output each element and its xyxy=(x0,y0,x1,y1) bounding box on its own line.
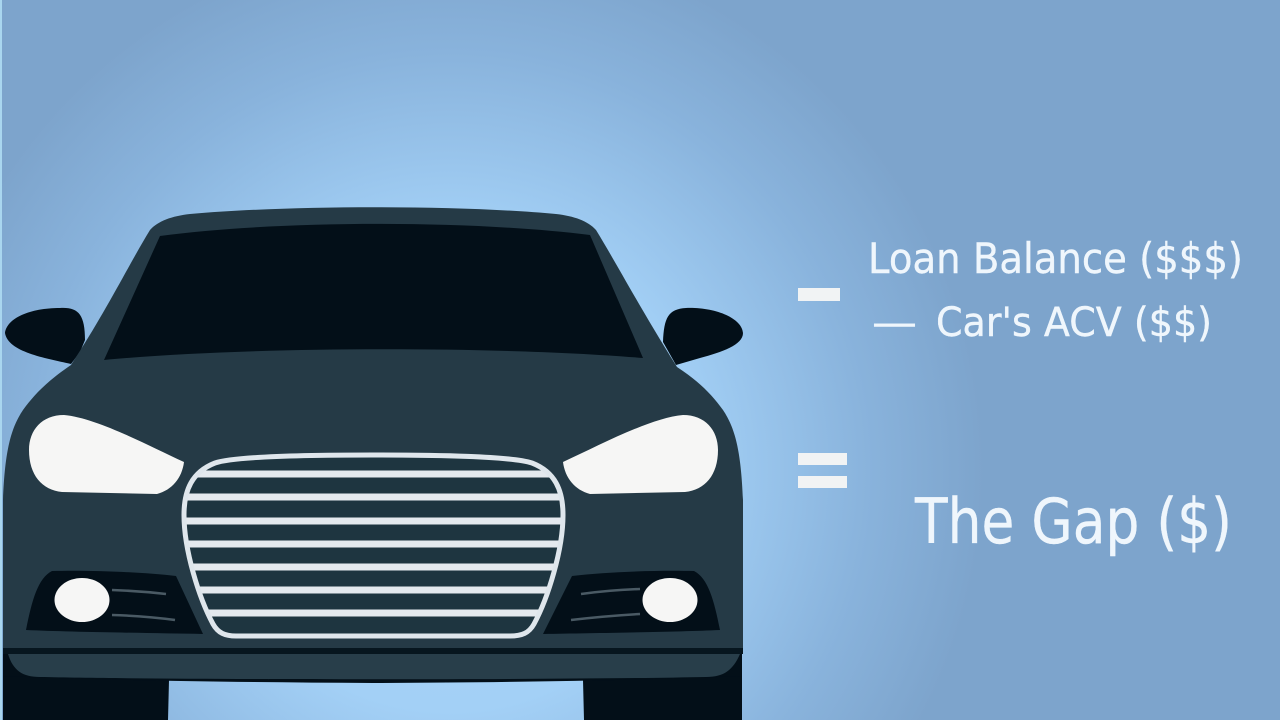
car body xyxy=(3,207,743,652)
bumper xyxy=(8,654,740,679)
wheels and underbody xyxy=(3,640,742,720)
fog lamp: right xyxy=(642,578,698,622)
fog lamp housing: right xyxy=(543,571,720,634)
grille xyxy=(180,455,570,636)
headlight: right xyxy=(563,415,718,494)
icon: left mirror xyxy=(5,308,85,364)
bumper line xyxy=(3,648,743,654)
car front view xyxy=(3,207,743,720)
text: car's ACV: — xyxy=(872,300,917,346)
text: car's ACV: Car's ACV ($$) xyxy=(936,300,1212,346)
fog lamp slats xyxy=(112,589,640,620)
minus sign xyxy=(798,288,840,301)
headlight: left xyxy=(29,415,184,494)
equals sign xyxy=(798,453,847,488)
fog lamp housing: left xyxy=(26,571,203,634)
text: the gap: The Gap ($) xyxy=(914,485,1232,558)
icon: right mirror xyxy=(663,308,743,365)
left edge strip xyxy=(0,0,2,720)
fog lamp: left xyxy=(54,578,110,622)
windshield xyxy=(104,224,643,360)
text: loan balance: Loan Balance ($$$) xyxy=(868,234,1243,283)
